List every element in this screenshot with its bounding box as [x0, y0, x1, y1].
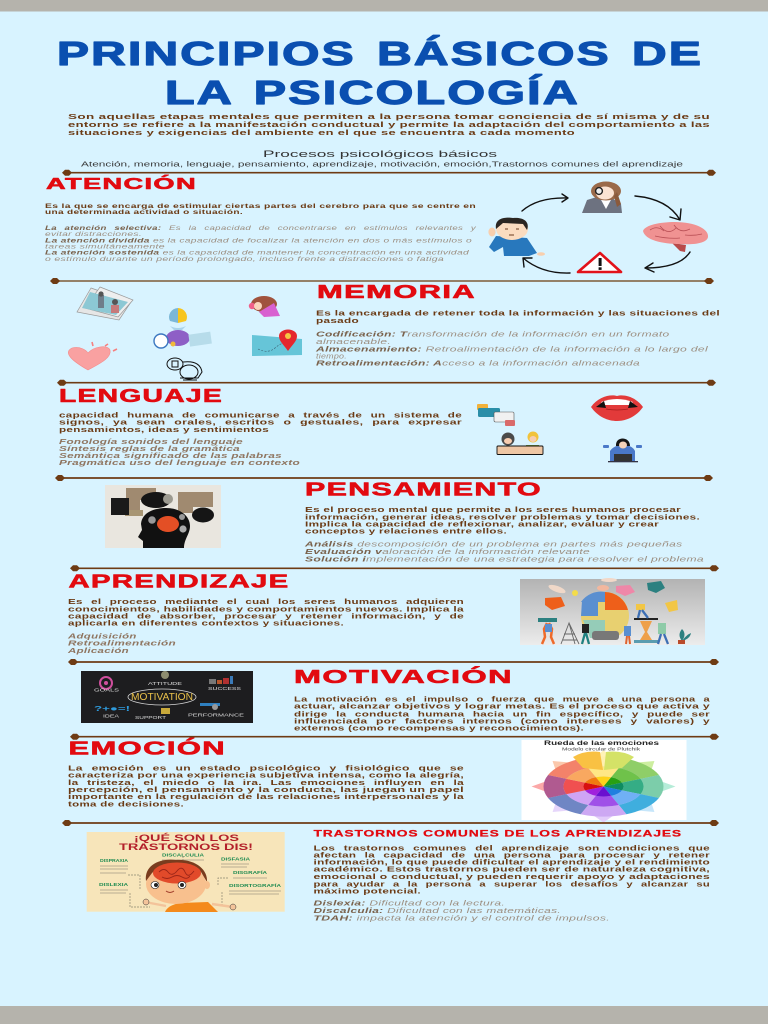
- text: definición de emoción: importante en la regulación de las relaciones interpersonales y la: [68, 792, 465, 801]
- text: definición de trastornos: [314, 843, 711, 895]
- text: fases de memoria: Retroalimentación: A cceso a la información almacenada: [316, 359, 640, 368]
- icon: dos personas traduciendo: [497, 432, 543, 454]
- icon: globos de diálogo: [477, 404, 515, 426]
- text: ejemplos de trastornos: Discalculia: Dificultad con las matemáticas.: [314, 906, 561, 915]
- arrow: abajo derecha: [645, 252, 690, 272]
- subtitle: procesos: Atención, memoria, lenguaje, pensamiento, aprendizaje, motivación, emoción,Trastornos comunes del aprendizaje: [81, 162, 683, 168]
- text: ejemplos de trastornos: Dislexia: Dificultad con la lectura.: [314, 899, 505, 908]
- text: definición de motivación: externos (como recompensas y reconocimientos).: [294, 723, 584, 732]
- image: rompecabezas con personas: [520, 578, 705, 645]
- panel: lenguaje: [59, 386, 643, 467]
- text: definición de atención: Es la que se encarga de estimular ciertas partes del cerebro para que se centre en: [45, 203, 476, 210]
- image: trastornos dis: ¡QUÉ SON LOS: [134, 833, 239, 844]
- icon: fotografías: [77, 287, 133, 320]
- text: tipos de atención: La atención selectiva: Es la capacidad de concentrarse en estímulos relevantes y: [45, 225, 477, 232]
- heading: trastornos comunes: TRASTORNOS COMUNES DE LOS APRENDIZAJES: [314, 828, 682, 840]
- text: definición de pensamiento: Es el proceso mental que permite a los seres humanos procesar: [305, 505, 681, 514]
- subtitle: procesos: Procesos psicológicos básicos: [263, 149, 497, 160]
- image: motivation: MOTIVATION: [131, 692, 193, 703]
- heading: aprendizaje: APRENDIZAJE: [68, 572, 290, 592]
- arrow: arriba derecha: [635, 196, 681, 220]
- text: etapas del pensamiento: Solución i mplementación de una estrategia para resolver el problema: [305, 554, 704, 563]
- text: definición de emoción: La emoción es un estado psicológico y fisiológico que se: [68, 764, 464, 773]
- heading: lenguaje: LENGUAJE: [59, 386, 223, 406]
- image: motivation: [81, 671, 253, 723]
- text: definición de emoción: caracteriza por una experiencia subjetiva intensa, como la alegría,: [68, 771, 464, 780]
- icon: labios: [591, 395, 643, 421]
- text: componentes del lenguaje: [59, 437, 301, 467]
- text: definición de trastornos: afectan la capacidad de una persona para procesar y retener: [314, 850, 710, 859]
- text: tipos de atención: La atención dividida es la capacidad de focalizar la atención en dos o más estímulos o: [45, 238, 473, 244]
- icon: ciclo de atención: [488, 182, 708, 273]
- intro text: situaciones y exigencias del ambiente en el que se encuentra a cada momento: [68, 128, 576, 137]
- title: [57, 35, 703, 111]
- panel: emoción: [68, 737, 686, 822]
- text: definición de pensamiento: Implica la capacidad de reflexionar, analizar, evaluar y crear: [305, 519, 659, 528]
- text: definición de trastornos: información, lo que puede dificultar el aprendizaje y el rendimiento: [314, 858, 711, 867]
- icon: corazón: [68, 342, 117, 370]
- text: fases de memoria: almacenable.: [316, 337, 391, 346]
- icon: mapa con pin: [252, 330, 302, 356]
- text: definición de motivación: actuar, alcanzar objetivos y lograr metas. Es el proceso que activa y: [294, 702, 710, 711]
- text: fases del aprendizaje: Aplicación: [66, 646, 130, 655]
- text: definición de aprendizaje: Es el proceso mediante el cual los seres humanos adquieren: [68, 597, 464, 606]
- text: definición de pensamiento: conceptos y relaciones entre ellos.: [305, 527, 507, 536]
- panel: memoria: [68, 282, 720, 380]
- panel: aprendizaje: [66, 572, 705, 655]
- panel: motivación: [81, 666, 711, 732]
- text: definición de lenguaje: [59, 411, 462, 434]
- text: definición de memoria: [316, 309, 720, 325]
- text: componentes del lenguaje: Pragmática uso del lenguaje en contexto: [59, 458, 301, 467]
- text: componentes del lenguaje: Fonología sonidos del lenguaje: [59, 437, 243, 446]
- text: fases de memoria: Almacenamiento: Retroalimentación de la información a lo largo del: [314, 344, 708, 353]
- text: definición de aprendizaje: conocimientos, habilidades y comportamientos nuevos. Implica la: [68, 605, 465, 614]
- text: definición de lenguaje: signos, ya sean orales, escritos o gestuales, para expresar: [59, 418, 462, 427]
- image: motivation: SUPPORT: [135, 715, 166, 720]
- text: definición de atención: [45, 203, 476, 216]
- title: PRINCIPIOS BÁSICOS DE: [57, 35, 703, 72]
- text: definición de trastornos: Los trastornos comunes del aprendizaje son condiciones que: [314, 843, 710, 852]
- icon: niño escuchando: [488, 218, 545, 256]
- text: definición de emoción: toma de decisiones.: [68, 800, 184, 809]
- text: etapas del pensamiento: Análisis descomposición de un problema en partes más pequeñas: [303, 540, 683, 549]
- text: definición de atención: una determinada actividad o situación.: [45, 209, 243, 216]
- image: motivation: IDEA: [103, 714, 119, 718]
- image: motivation: PERFORMANCE: [188, 712, 244, 718]
- icon: mujer con lupa: [582, 182, 622, 213]
- image: trastornos dis: DISORTOGRAFÍA: [229, 881, 282, 888]
- chart: rueda de las emociones: [522, 740, 686, 822]
- text: definición de trastornos: máximo potencial.: [314, 886, 421, 895]
- panel: pensamiento: [105, 480, 704, 563]
- text: definición de lenguaje: pensamientos, ideas y sentimientos: [59, 425, 269, 434]
- text: tipos de atención: La atención sostenida es la capacidad de mantener la concentración en una actividad: [45, 250, 470, 257]
- text: componentes del lenguaje: Semántica significado de las palabras: [59, 451, 282, 460]
- intro text: entorno se refiere a la manifestación conductual y permite la adaptación del comportamiento a las: [68, 120, 710, 129]
- text: definición de trastornos: académico. Estos trastornos pueden ser de naturaleza cognitiva,: [314, 865, 710, 874]
- text: fases de memoria: [314, 330, 708, 368]
- intro text: [68, 112, 710, 137]
- icon: persona con laptop: [603, 438, 642, 462]
- text: tipos de atención: tareas simultáneamente: [45, 244, 166, 251]
- text: tipos de atención: [45, 225, 477, 263]
- subtitle: procesos: [81, 149, 683, 168]
- image: trastornos dis: DISLEXIA: [99, 882, 129, 887]
- image: trastornos dis: DISCALCULIA: [162, 852, 205, 858]
- panel: atención: [45, 174, 708, 273]
- image: motivation: ATTITUDE: [148, 681, 182, 686]
- chart: rueda de las emociones: Rueda de las emociones: [544, 741, 660, 747]
- chart: rueda de las emociones: Modelo circular de Plutchik: [562, 746, 641, 752]
- icon: mujer recordando: [167, 358, 202, 380]
- text: fases del aprendizaje: [66, 632, 177, 655]
- text: etapas del pensamiento: [303, 540, 704, 563]
- arrow: abajo izquierda: [523, 258, 570, 273]
- text: definición de aprendizaje: capacidad de absorber, procesar y retener información, y de: [68, 612, 464, 621]
- text: definición de memoria: Es la encargada de retener toda la información y las situaciones del: [316, 309, 720, 318]
- arrow: arriba izquierda: [522, 194, 568, 211]
- icon: bombilla y reloj: [154, 308, 212, 348]
- image: motivation: SUCCESS: [208, 686, 241, 691]
- text: fases de memoria: tiempo.: [316, 352, 347, 361]
- text: definición de motivación: dirige la conducta humana hacia un fin específico, y puede ser: [294, 709, 710, 718]
- text: tipos de atención: o estímulo durante un período prolongado, incluso frente a distracciones o fatiga: [45, 256, 445, 263]
- text: definición de motivación: influenciada por factores internos (como intereses y valores) y: [294, 716, 710, 725]
- text: definición de motivación: [294, 695, 711, 732]
- text: componentes del lenguaje: Síntesis reglas de la gramática: [59, 444, 240, 453]
- text: definición de aprendizaje: [68, 597, 465, 628]
- text: definición de pensamiento: información, generar ideas, resolver problemas y tomar decisiones.: [305, 512, 700, 521]
- text: etapas del pensamiento: Evaluación v aloración de la información relevante: [305, 547, 590, 556]
- text: definición de memoria: pasado: [316, 316, 360, 325]
- text: definición de trastornos: para ayudar a la persona a superar los desafíos y alcanzar su: [314, 879, 710, 888]
- text: definición de emoción: [68, 764, 465, 809]
- text: definición de lenguaje: capacidad humana de comunicarse a través de un sistema de: [59, 411, 462, 420]
- text: fases del aprendizaje: Adquisición: [66, 632, 137, 641]
- image: trastornos dis: TRASTORNOS DIS!: [119, 842, 253, 853]
- image: cabeza con engranajes: [105, 485, 221, 548]
- text: ejemplos de trastornos: [314, 899, 610, 922]
- icon: señal de advertencia: [578, 253, 621, 272]
- image: trastornos dis: DISGRAFÍA: [233, 868, 268, 875]
- intro text: Son aquellas etapas mentales que permiten a la persona tomar conciencia de sí misma y de su: [68, 112, 710, 121]
- heading: memoria: MEMORIA: [317, 282, 476, 302]
- image: trastornos dis: [87, 832, 285, 912]
- heading: motivación: MOTIVACIÓN: [294, 666, 513, 687]
- text: fases del aprendizaje: Retroalimentación: [68, 639, 177, 648]
- text: definición de motivación: La motivación es el impulso o fuerza que mueve a una persona a: [294, 695, 711, 704]
- text: definición de trastornos: emocional o conductual, y pueden requerir apoyo y adaptaciones: [314, 872, 710, 881]
- text: definición de aprendizaje: aplicarla en diferentes contextos y situaciones.: [68, 619, 344, 628]
- text: definición de pensamiento: [305, 505, 700, 536]
- image: motivation: ?+●=!: [94, 704, 130, 713]
- heading: emoción: EMOCIÓN: [68, 737, 226, 758]
- title: LA PSICOLOGÍA: [165, 74, 580, 111]
- panel: trastornos: [87, 828, 711, 922]
- heading: pensamiento: PENSAMIENTO: [305, 480, 542, 500]
- text: tipos de atención: evitar distracciones.: [45, 231, 142, 238]
- image: motivation: GOALS: [94, 688, 119, 692]
- image: trastornos dis: DISFASIA: [221, 856, 251, 862]
- text: fases de memoria: Codificación: T ransformación de la información en un formato: [316, 330, 670, 339]
- heading: atención: ATENCIÓN: [46, 174, 197, 193]
- text: ejemplos de trastornos: TDAH: impacta la atención y el control de impulsos.: [314, 913, 610, 922]
- text: definición de emoción: percepción, el pensamiento y la conducta, las juegan un papel: [68, 785, 464, 794]
- image: trastornos dis: DISPRAXIA: [100, 858, 129, 863]
- icon: cerebro: [643, 222, 708, 252]
- text: definición de emoción: la tristeza, el miedo o la ira. Las emociones influyen en la: [68, 778, 465, 787]
- icon: mujer con flor: [249, 296, 280, 317]
